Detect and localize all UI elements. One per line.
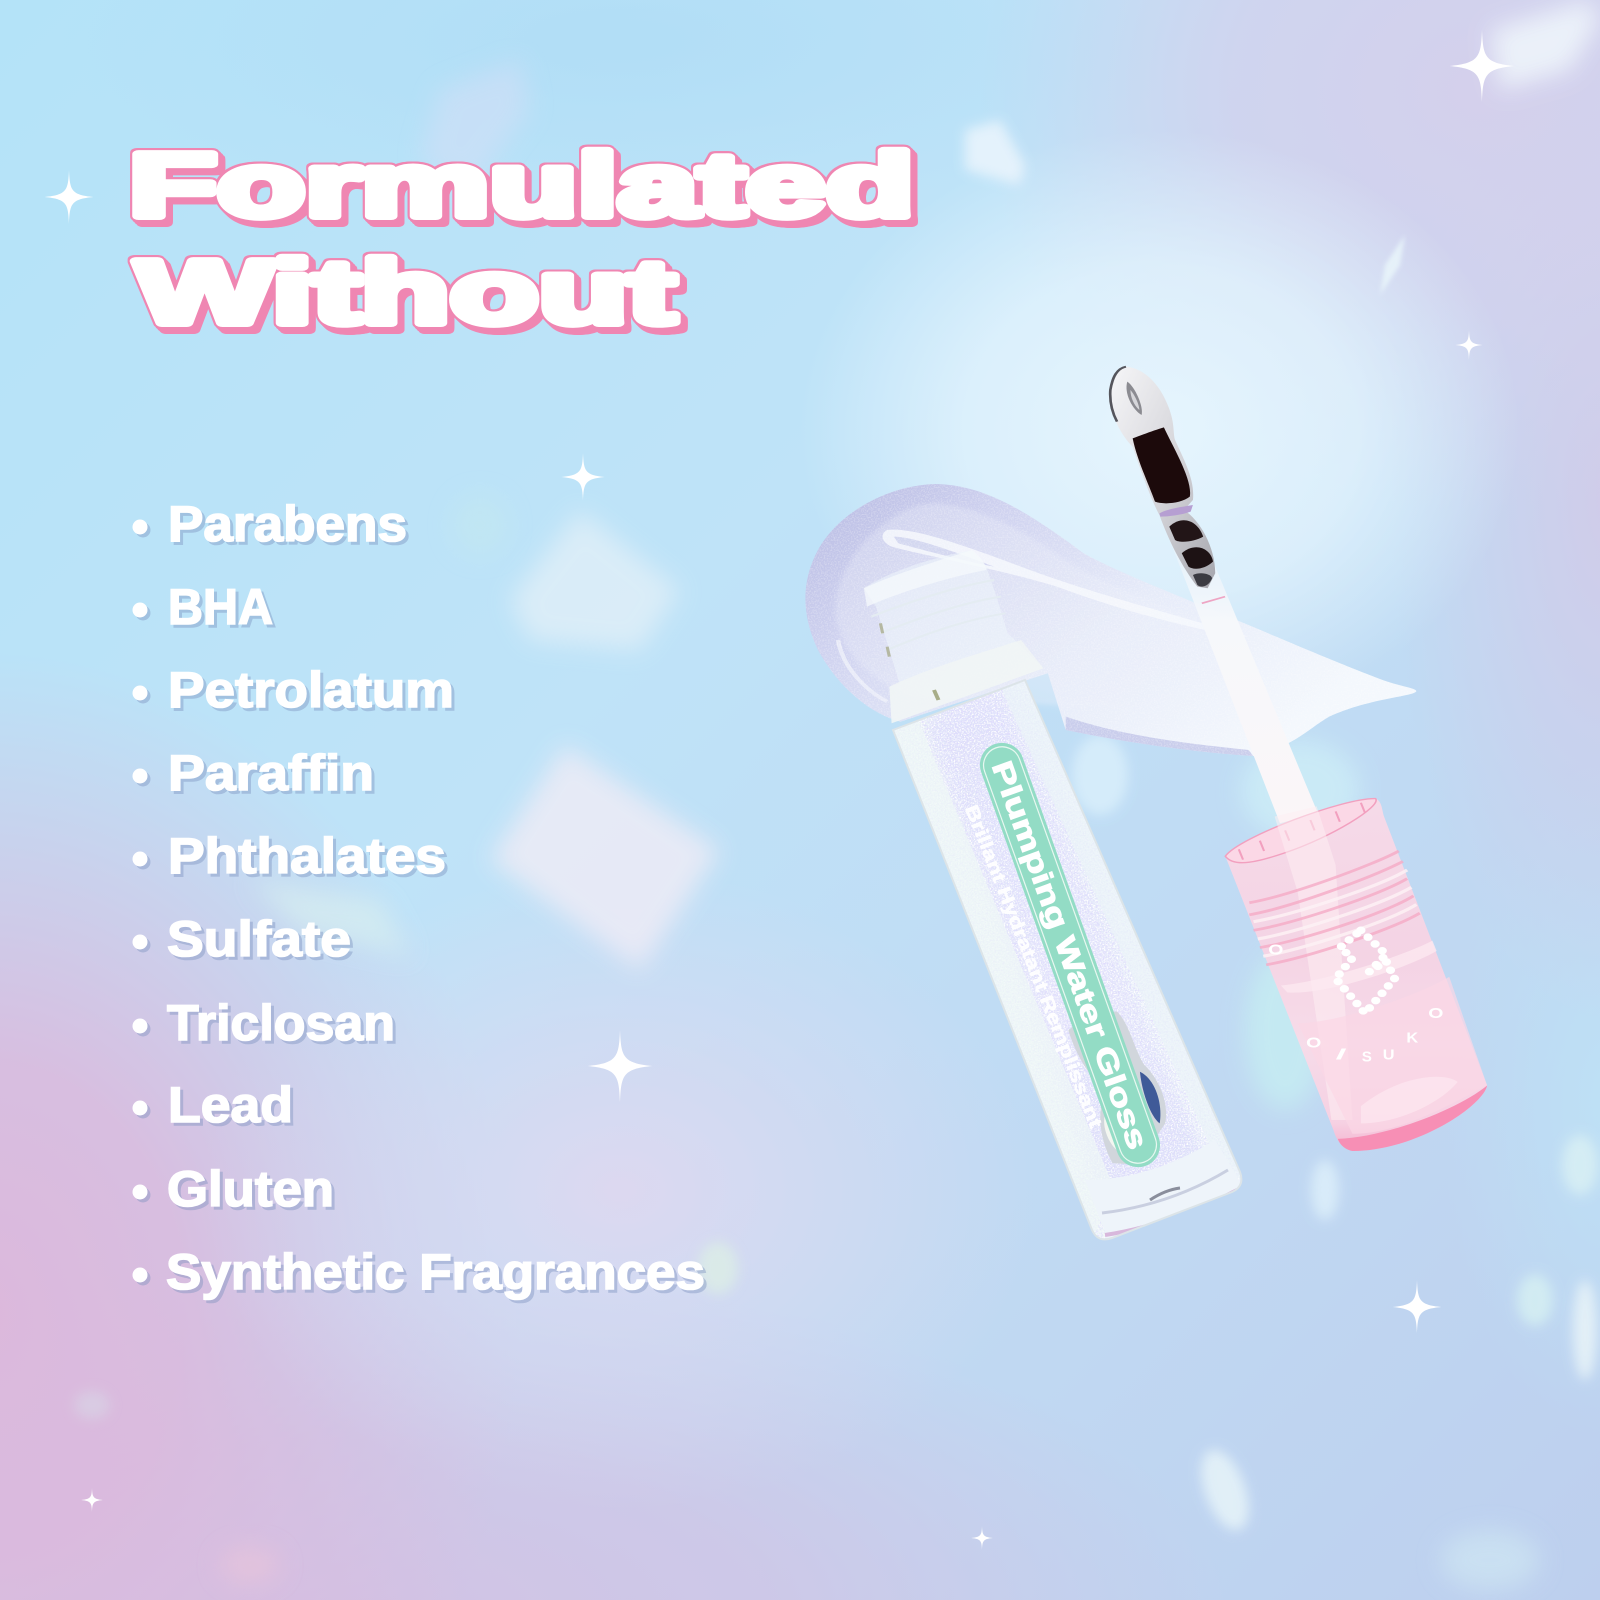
ingredient list: BHA [168,579,273,635]
mint label: Plumping Water Gloss [985,757,1153,1154]
cap rim [1225,799,1376,863]
ingredient list [132,496,705,1300]
ingredient list: Petrolatum [168,662,454,718]
cap logo [1336,930,1395,1013]
cap letters: U [1383,1046,1395,1063]
gloss tube [864,550,1250,1250]
cap base [1338,1085,1487,1151]
cap letters [1268,941,1443,1065]
title [129,136,914,343]
ingredient list: Gluten [167,1161,334,1217]
applicator tip [1110,367,1215,588]
ingredient list: Phthalates [168,828,446,884]
ingredient list: Parabens [168,496,407,552]
inner stem [1275,806,1352,1120]
gloss smear [800,480,1420,760]
threads [1249,851,1420,965]
inner applicator silhouette [1068,1011,1166,1165]
ingredient list: Triclosan [167,995,395,1051]
ingredient list: Sulfate [167,911,351,967]
ingredient list: Lead [168,1077,293,1133]
cap letters: O [1306,1034,1321,1051]
cap letters: S [1362,1048,1372,1065]
subtitle: Brillant Hydratant Remplissant [961,802,1107,1131]
cap letters: K [1406,1029,1419,1046]
ingredient list: Paraffin [168,745,374,801]
mint label [974,737,1166,1173]
ingredient list: Synthetic Fragrances [166,1244,705,1300]
cap letters: / [1336,1046,1347,1063]
tube body [893,680,1241,1239]
tube neck [864,550,1043,723]
title: Without [136,243,676,343]
wand stem [1168,537,1318,823]
cap letters: O [1268,941,1283,958]
title: Formulated [129,136,914,236]
cap letters: O [1428,1005,1443,1022]
applicator wand [1110,367,1318,823]
pink cap [1225,799,1487,1151]
